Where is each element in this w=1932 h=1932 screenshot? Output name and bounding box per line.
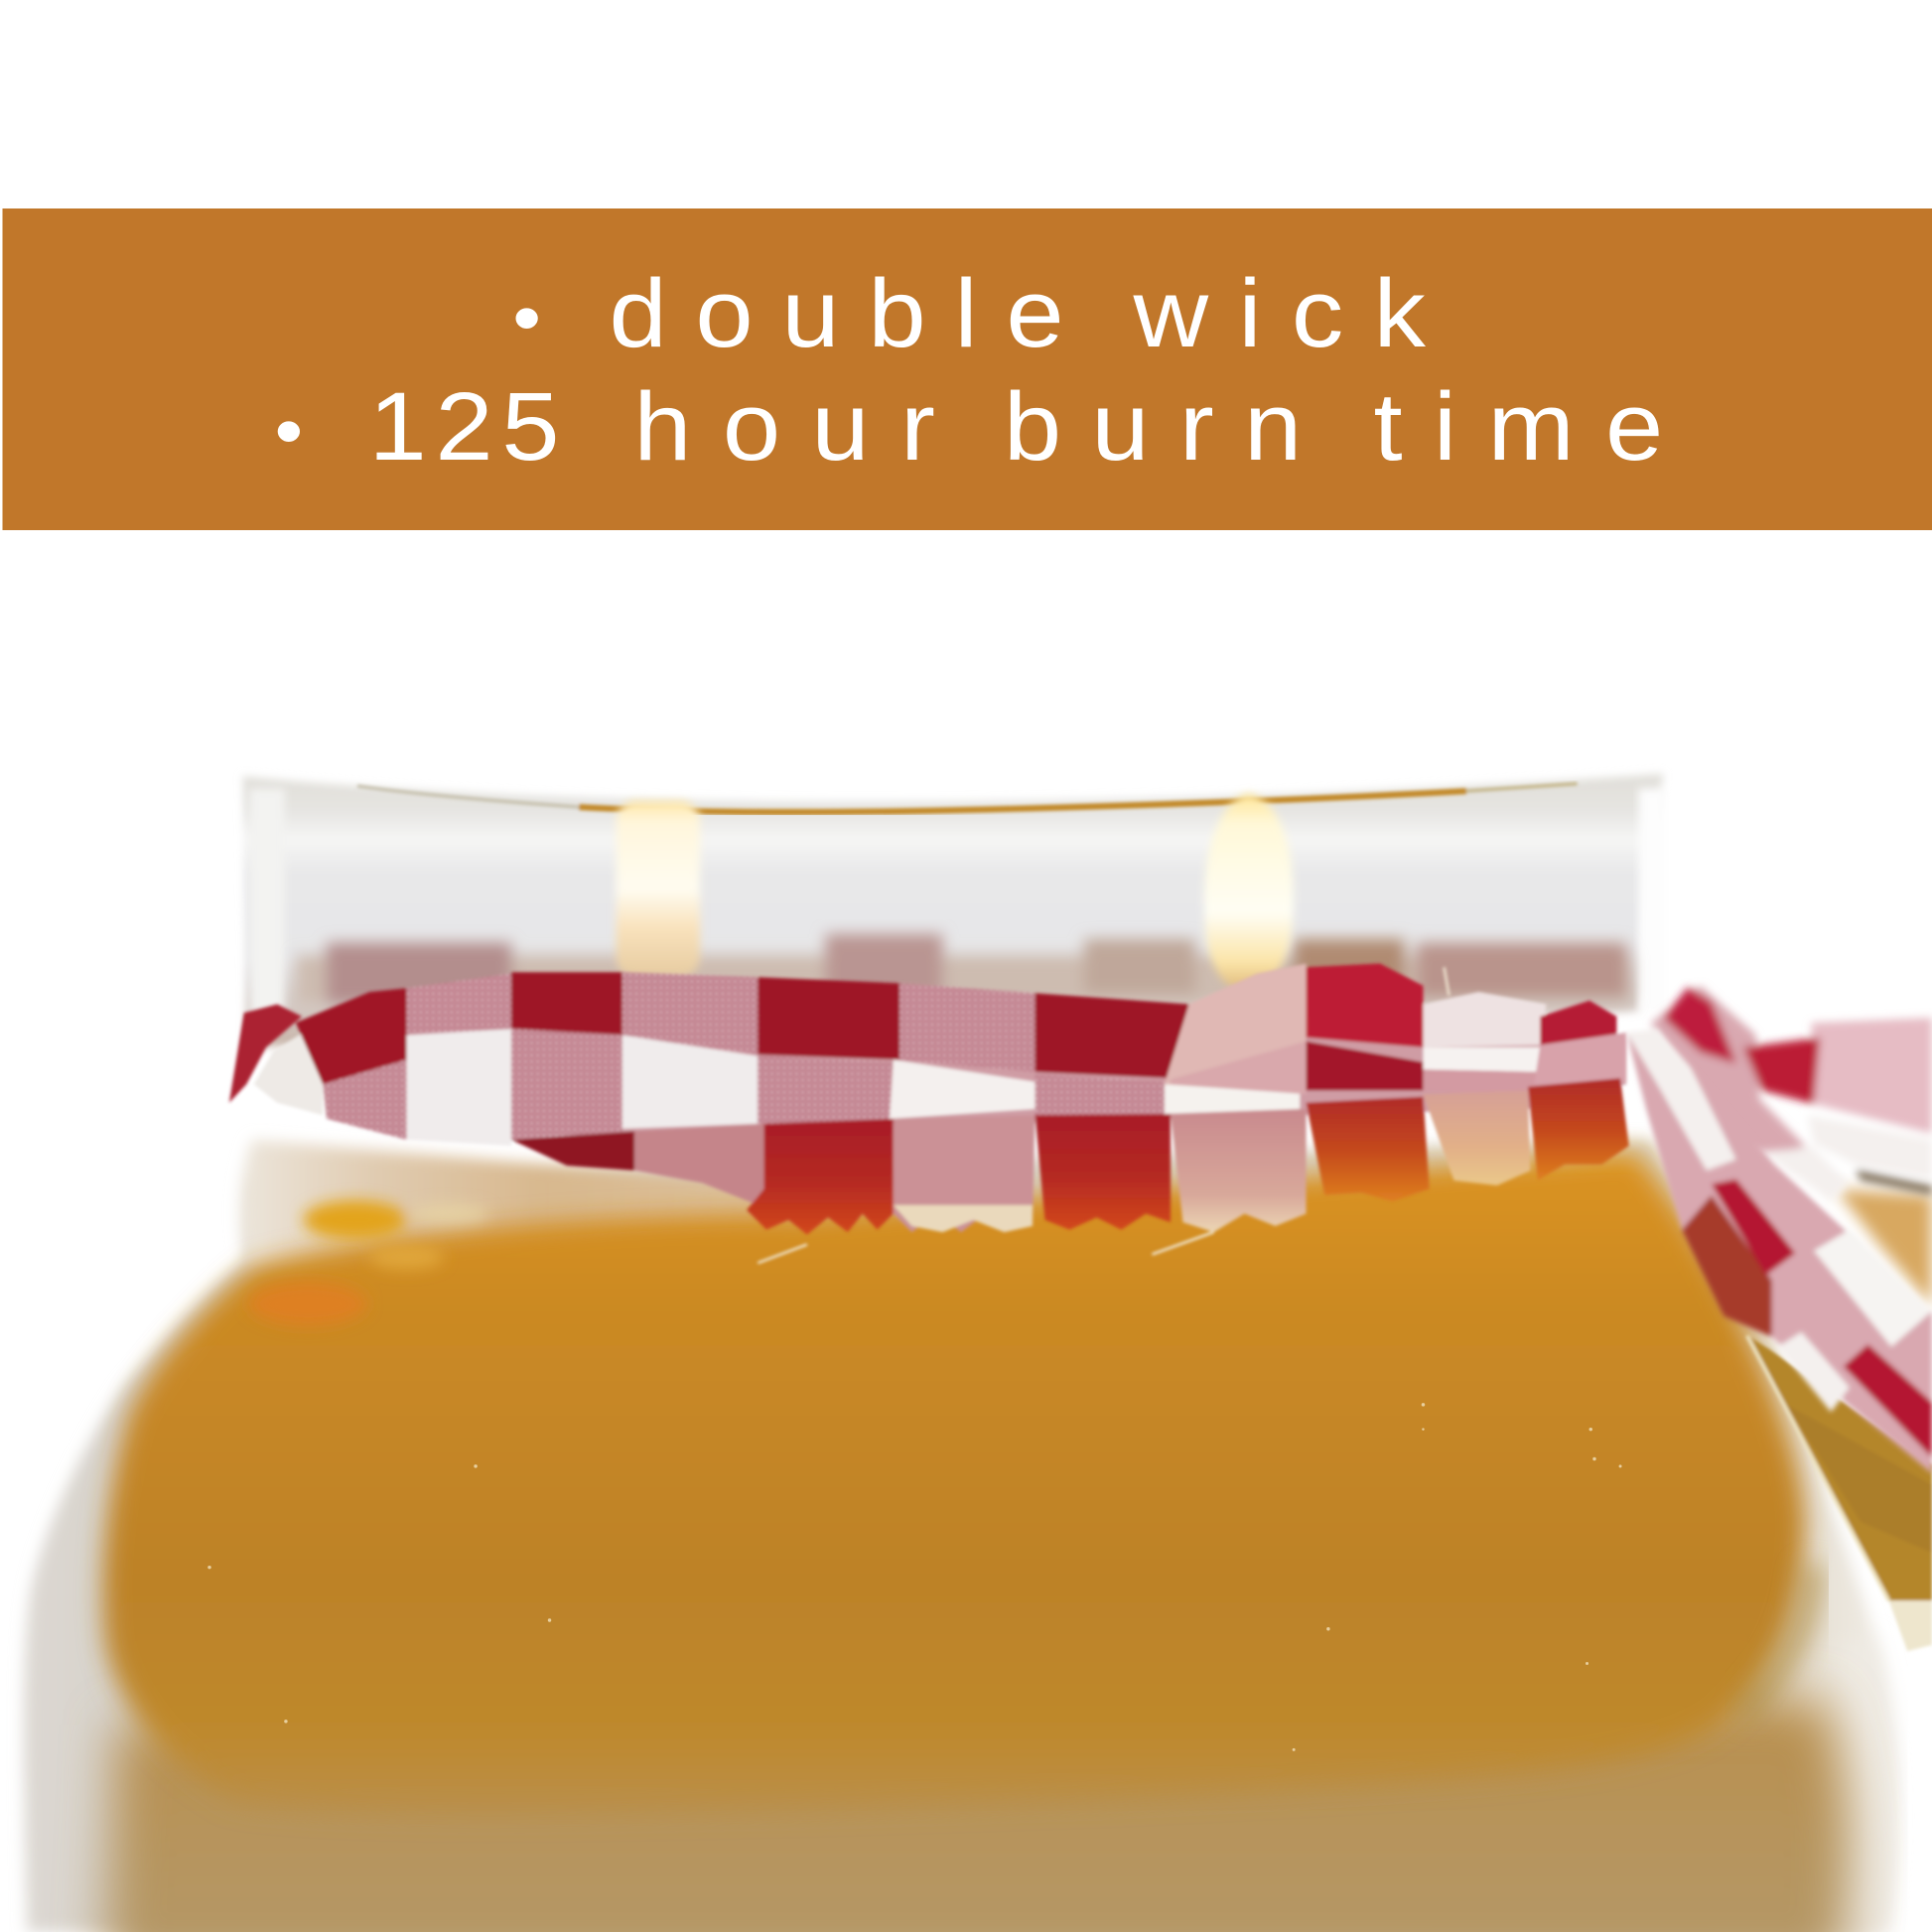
lower wax tan band xyxy=(104,1701,1850,1932)
line: 125 hour burn time: time xyxy=(1373,374,1695,481)
wax specks xyxy=(207,1403,1622,1751)
line: 125 hour burn time: • xyxy=(274,388,303,473)
banner xyxy=(2,208,1932,530)
wax shadow arc right xyxy=(1739,1565,1814,1716)
line: 125 hour burn time: burn xyxy=(1004,374,1331,481)
line: 125 hour burn time: 125 xyxy=(369,374,568,481)
ribbon left tip xyxy=(229,1004,302,1103)
neck left rim highlight xyxy=(250,788,285,1023)
ribbon backing xyxy=(407,998,1626,1140)
line: double wick: wick xyxy=(1133,261,1455,367)
left flame xyxy=(617,801,700,977)
gingham ribbon xyxy=(229,964,1629,1263)
wax orange highlight xyxy=(249,1200,489,1325)
candle photo xyxy=(24,773,1932,1932)
fray threads xyxy=(758,967,1449,1263)
line: 125 hour burn time: hour xyxy=(633,374,966,481)
ribbon knot and lower tail xyxy=(1626,1029,1932,1473)
ribbon lower row xyxy=(511,1078,1629,1235)
ribbon upper row xyxy=(296,964,1616,1090)
label behind upper tail xyxy=(1836,1189,1932,1307)
greeting tag xyxy=(1747,1335,1932,1651)
banner background xyxy=(2,208,1932,530)
amber rim line xyxy=(357,783,1578,812)
right flame xyxy=(1204,793,1294,992)
line: double wick: • xyxy=(512,275,541,359)
amber wax xyxy=(103,1152,1805,1814)
wax shoulder cream band xyxy=(239,1140,788,1269)
ribbon middle row xyxy=(323,1029,1626,1146)
line: double wick: double xyxy=(609,261,1092,367)
fabric reflection in glass xyxy=(296,934,1632,1004)
jar neck glass xyxy=(242,773,1663,1047)
jar body glass xyxy=(24,1140,1896,1932)
tail backing xyxy=(1626,1033,1932,1473)
ribbon upper tail xyxy=(1651,986,1932,1201)
neck right edge fade xyxy=(1639,788,1666,1011)
glass pale inner reflection right xyxy=(1836,1639,1895,1932)
